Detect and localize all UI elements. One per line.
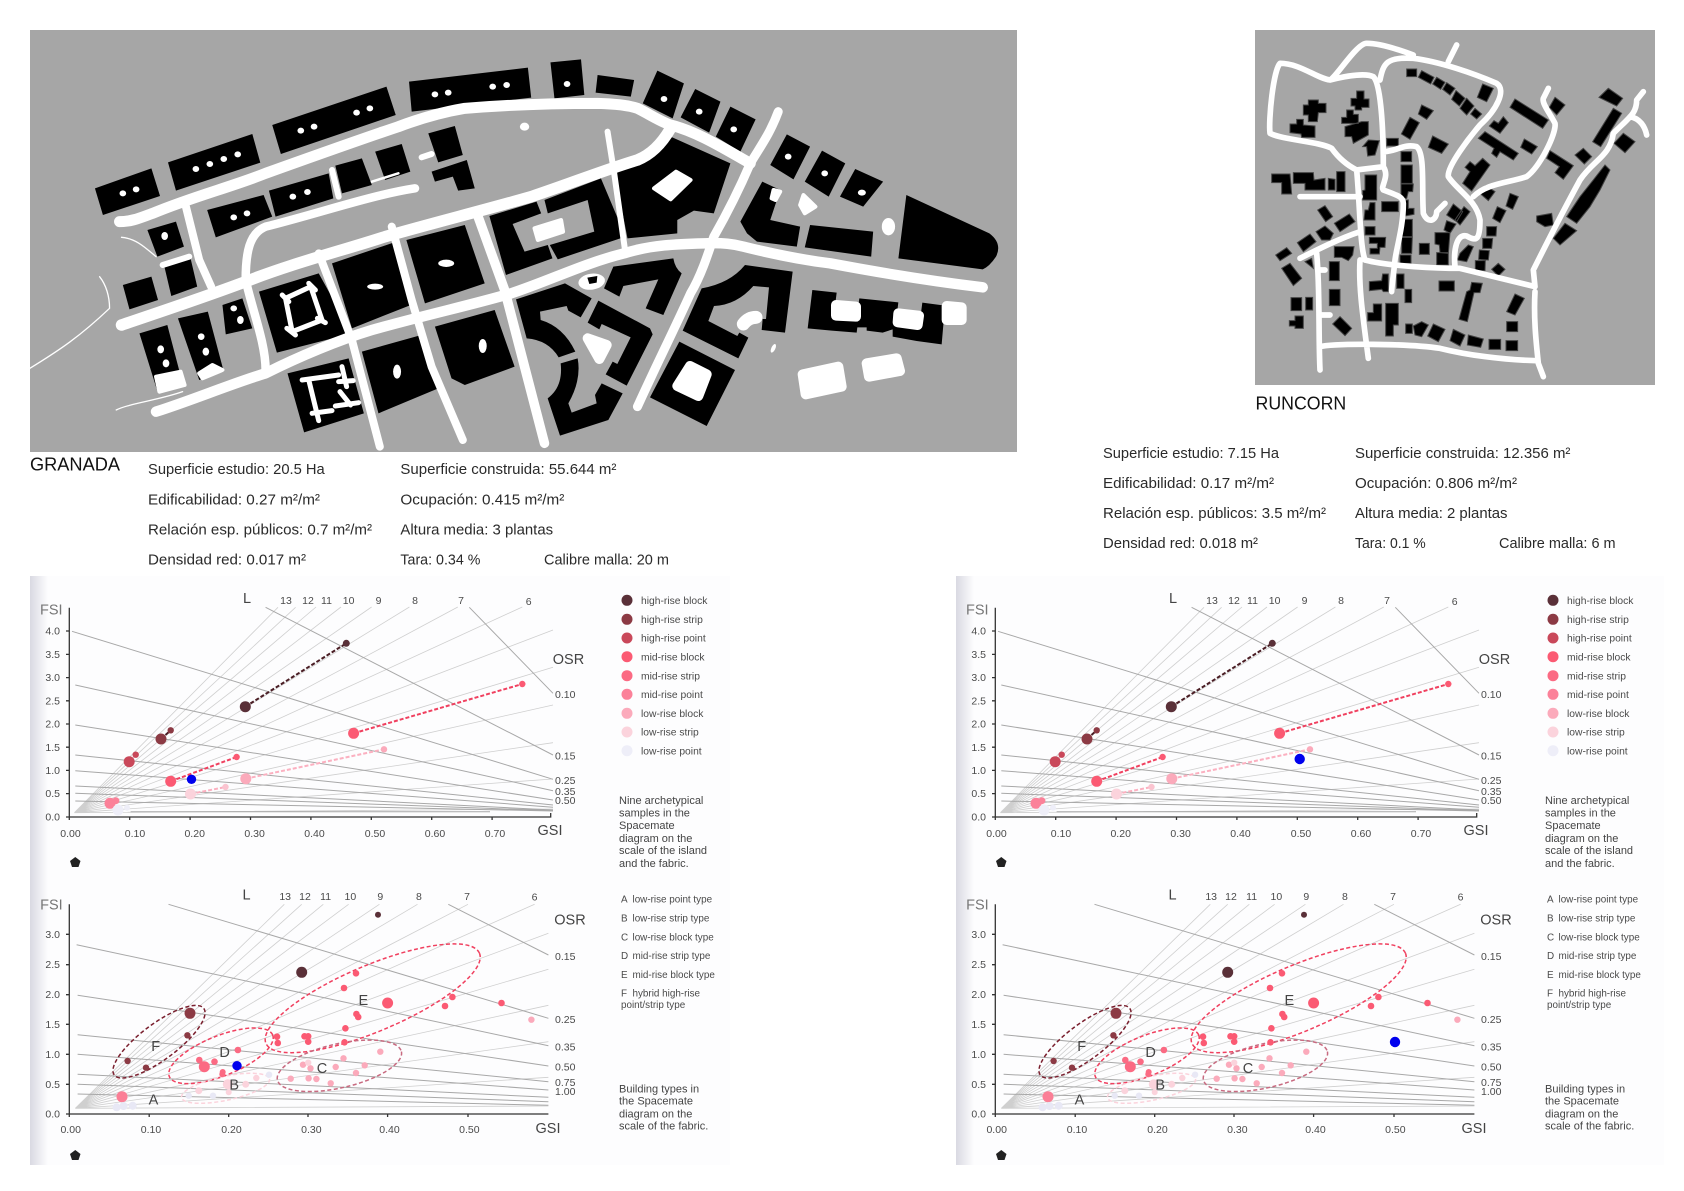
legend: fabric types: C <box>621 932 628 943</box>
axis and group labels: 0.25 <box>555 1014 576 1026</box>
axis and group labels: 8 <box>1342 891 1348 903</box>
stats: Granada: Calibre malla: 20 m <box>544 551 669 568</box>
axis labels: 7 <box>1384 595 1390 607</box>
legend: fabric types: mid-rise block type <box>1558 970 1641 981</box>
stats: Runcorn: Superficie construida: 12.356 m² <box>1355 445 1570 462</box>
legend: fabric types: low-rise block type <box>1558 932 1640 943</box>
axis labels: 0.70 <box>1411 828 1431 840</box>
axis labels: GSI <box>1464 823 1488 839</box>
axis and group labels: FSI <box>966 898 989 914</box>
legend: building types: mid-rise point <box>641 690 703 701</box>
axis labels: 10 <box>1269 595 1281 607</box>
axis labels: 0.15 <box>1481 750 1502 762</box>
axis labels: 9 <box>376 595 382 607</box>
axis labels: 0.35 <box>1481 786 1502 798</box>
axis labels: GSI <box>538 823 562 839</box>
axis and group labels: D <box>1145 1045 1156 1061</box>
legend: fabric types: point/strip type <box>621 1000 686 1011</box>
ellipse groups A-F <box>103 923 492 1109</box>
axis and group labels: 0.00 <box>60 1124 81 1136</box>
axis and group labels: OSR <box>1480 912 1512 928</box>
axis labels: 2.0 <box>45 718 60 730</box>
axis labels <box>40 591 584 840</box>
axis labels: 0.25 <box>1481 775 1502 787</box>
stats: Granada: Superficie construida: 55.644 m² <box>400 461 616 478</box>
axis and group labels: 1.5 <box>971 1019 986 1031</box>
caption: nine archetypical samples <box>619 795 707 870</box>
legend: building types: low-rise block <box>1567 709 1630 720</box>
axis labels: 0.40 <box>304 828 325 840</box>
axis and group labels: F <box>151 1039 160 1055</box>
legend: building types: high-rise point <box>641 634 706 645</box>
stats: Granada: Altura media: 3 plantas <box>400 521 553 538</box>
axis labels: 3.0 <box>45 672 60 684</box>
axis and group labels: 2.5 <box>45 959 60 971</box>
axis and group labels: 2.0 <box>45 989 60 1001</box>
axis labels: 12 <box>302 595 314 607</box>
marker: Runcorn position <box>1294 754 1305 764</box>
legend: building types: low-rise strip <box>1567 728 1625 739</box>
legend: fabric types: low-rise point type <box>1558 895 1639 906</box>
axis and group labels: 9 <box>1303 891 1309 903</box>
legend: fabric types: hybrid high-rise <box>632 989 701 1000</box>
axis and group labels: 0.10 <box>141 1124 161 1136</box>
legend: building types: high-rise block <box>1567 596 1634 607</box>
icon: publisher mark <box>70 857 80 867</box>
stats: Granada: Edificabilidad: 0.27 m²/m² <box>148 492 320 508</box>
axis and group labels: 0.35 <box>1481 1042 1502 1054</box>
axis labels: 11 <box>1247 595 1258 607</box>
axis labels: FSI <box>966 602 989 618</box>
axis labels: 2.5 <box>45 696 60 708</box>
legend: building types: high-rise strip <box>641 615 703 626</box>
axis labels: 4.0 <box>45 626 60 638</box>
legend: building types: mid-rise point <box>1567 690 1629 701</box>
caption: building types: Building types in <box>619 1083 699 1095</box>
marker: Granada position <box>232 1061 242 1070</box>
axis labels: 0.10 <box>1481 689 1502 701</box>
legend: fabric types: low-rise block type <box>632 932 714 943</box>
axis and group labels: 0.50 <box>1385 1124 1406 1136</box>
axis labels: 11 <box>321 595 332 607</box>
data points <box>113 912 535 1111</box>
stats: Runcorn: Calibre malla: 6 m <box>1499 535 1616 552</box>
axis labels: 0.10 <box>555 689 576 701</box>
axis labels: 3.5 <box>45 649 60 661</box>
axis and group labels: 10 <box>345 891 356 903</box>
axis labels: FSI <box>40 602 63 618</box>
stats: Granada: Ocupación: 0.415 m²/m² <box>400 492 564 508</box>
axis labels: 2.0 <box>971 718 986 730</box>
icon: publisher mark <box>996 857 1006 867</box>
legend: fabric types: E <box>1547 970 1554 981</box>
stats: Granada: Superficie estudio: 20.5 Ha <box>148 461 325 478</box>
caption: nine archetypical samples: Spacemate <box>619 820 675 832</box>
axis and group labels: 6 <box>1458 892 1464 904</box>
axis and group labels: 0.15 <box>1481 951 1502 963</box>
map: Runcorn figure-ground plan <box>1255 30 1655 385</box>
legend: fabric types <box>1547 895 1641 1011</box>
axis and group labels: 0.5 <box>45 1079 60 1091</box>
axis labels: 9 <box>1302 595 1308 607</box>
legend: building types: low-rise block <box>641 709 704 720</box>
legend: fabric types: low-rise strip type <box>632 913 710 924</box>
axis labels: 0.50 <box>365 828 385 840</box>
axis and group labels: 0.50 <box>555 1062 576 1074</box>
axis and group labels: 0.40 <box>379 1124 400 1136</box>
legend: building types: mid-rise block <box>1567 652 1631 663</box>
axis labels: L <box>1169 591 1177 607</box>
axis and group labels <box>966 888 1512 1137</box>
axis labels: OSR <box>1479 652 1510 668</box>
stats: Granada: Relación esp. públicos: 0.7 m²/m² <box>148 521 372 538</box>
caption: building types: diagram on the <box>619 1108 692 1120</box>
legend: fabric types: E <box>621 970 628 981</box>
caption: building types: the Spacemate <box>619 1096 693 1108</box>
axis labels: 4.0 <box>971 626 986 638</box>
axis and group labels: OSR <box>554 912 586 928</box>
axis labels: 0.5 <box>45 788 60 800</box>
caption: nine archetypical samples <box>1545 795 1633 870</box>
legend: building types: low-rise point <box>1567 746 1628 757</box>
axis and group labels: L <box>243 888 251 904</box>
legend: building types: high-rise block <box>641 596 708 607</box>
legend: fabric types: D <box>1547 951 1554 962</box>
axis and group labels: 0.20 <box>1147 1124 1168 1136</box>
axis and group labels: D <box>219 1045 230 1061</box>
stats: Runcorn: Altura media: 2 plantas <box>1355 505 1508 522</box>
axis and group labels: FSI <box>40 898 63 914</box>
caption: nine archetypical samples: Spacemate <box>1545 820 1601 832</box>
marker: Granada position <box>187 775 196 784</box>
axis and group labels: A <box>1075 1092 1085 1108</box>
axis and group labels: 0.0 <box>45 1108 60 1120</box>
legend: fabric types: mid-rise block type <box>632 970 715 981</box>
stats: Runcorn: Relación esp. públicos: 3.5 m²/m² <box>1103 505 1326 522</box>
stats: Granada: Densidad red: 0.017 m² <box>148 551 306 568</box>
axis and group labels: 0.35 <box>555 1042 576 1054</box>
chart: Runcorn fabric scale <box>966 888 1512 1160</box>
axis and group labels: 1.00 <box>1481 1086 1502 1098</box>
axis and group labels: A <box>149 1092 159 1108</box>
stats: Runcorn: Ocupación: 0.806 m²/m² <box>1355 475 1517 492</box>
legend: building types <box>1548 595 1634 757</box>
axis and group labels: 6 <box>532 892 538 904</box>
legend: fabric types: F <box>1547 989 1553 1000</box>
chart: Granada fabric scale <box>40 888 586 1160</box>
legend: building types <box>622 595 708 757</box>
axis labels: 0.10 <box>1051 828 1071 840</box>
chart: Granada island scale <box>40 591 584 867</box>
axis and group labels: B <box>1155 1078 1165 1094</box>
axis labels: L <box>243 591 251 607</box>
axis labels: 0.35 <box>555 786 576 798</box>
axis and group labels <box>40 888 586 1137</box>
heading: Granada: GRANADA <box>30 454 120 474</box>
axis and group labels: 1.0 <box>971 1049 986 1061</box>
axis labels: 10 <box>343 595 355 607</box>
axis labels: 8 <box>1338 595 1344 607</box>
axis and group labels: 10 <box>1271 891 1282 903</box>
legend: fabric types: A <box>1547 895 1554 906</box>
axis labels: 0.20 <box>184 828 205 840</box>
caption: nine archetypical samples: Nine archetypical <box>619 795 703 807</box>
caption: nine archetypical samples: scale of the island <box>1545 845 1633 857</box>
axis labels: 0.70 <box>485 828 505 840</box>
caption: nine archetypical samples: and the fabric. <box>619 858 689 870</box>
caption: building types: diagram on the <box>1545 1108 1618 1120</box>
axis and group labels: E <box>1284 993 1294 1009</box>
caption: nine archetypical samples: and the fabric. <box>1545 858 1615 870</box>
icon: publisher mark <box>996 1150 1006 1160</box>
legend: fabric types: point/strip type <box>1547 1000 1612 1011</box>
axis and group labels: 13 <box>279 891 291 903</box>
ellipse groups A-F <box>1029 923 1418 1109</box>
stats: Runcorn: Tara: 0.1 % <box>1355 535 1426 552</box>
marker: Runcorn position <box>1390 1037 1400 1047</box>
axis labels: 13 <box>1206 595 1218 607</box>
stats: Runcorn <box>1103 445 1616 552</box>
axis labels: 8 <box>412 595 418 607</box>
caption: nine archetypical samples: scale of the island <box>619 845 707 857</box>
axis and group labels: 11 <box>1246 891 1257 903</box>
caption: building types <box>1545 1083 1634 1133</box>
axis and group labels: C <box>317 1061 327 1077</box>
axis labels: 0.15 <box>555 750 576 762</box>
stats: Granada <box>148 461 669 568</box>
axis and group labels: 9 <box>377 891 383 903</box>
axis labels: OSR <box>553 652 584 668</box>
axis labels: 0.5 <box>971 788 986 800</box>
axis and group labels: 3.0 <box>971 929 986 941</box>
axis and group labels: 0.00 <box>986 1124 1007 1136</box>
axis and group labels: 1.0 <box>45 1049 60 1061</box>
panel: Granada Spacemate diagrams <box>30 576 730 1165</box>
legend: fabric types: mid-rise strip type <box>632 951 711 962</box>
stats: Granada: Tara: 0.34 % <box>400 551 480 568</box>
heading: Runcorn: RUNCORN <box>1256 394 1346 414</box>
axis and group labels: 2.0 <box>971 989 986 1001</box>
axis and group labels: E <box>358 993 368 1009</box>
axis and group labels: 1.5 <box>45 1019 60 1031</box>
axis and group labels: 7 <box>464 891 470 903</box>
caption: building types: scale of the fabric. <box>619 1121 708 1133</box>
legend: fabric types: hybrid high-rise <box>1558 989 1627 1000</box>
axis labels: 12 <box>1228 595 1240 607</box>
axis labels: 0.0 <box>45 812 60 824</box>
caption: nine archetypical samples: diagram on the <box>1545 833 1618 845</box>
axis and group labels: 0.75 <box>1481 1077 1502 1089</box>
axis and group labels: 0.10 <box>1067 1124 1087 1136</box>
axis and group labels: 0.25 <box>1481 1014 1502 1026</box>
axis labels: 1.0 <box>45 765 60 777</box>
axis labels: 3.0 <box>971 672 986 684</box>
axis and group labels: L <box>1169 888 1177 904</box>
legend: fabric types: F <box>621 989 627 1000</box>
axis labels: 0.25 <box>555 775 576 787</box>
axis and group labels: GSI <box>536 1121 560 1137</box>
legend: building types: mid-rise strip <box>1567 671 1626 682</box>
axis labels: 7 <box>458 595 464 607</box>
caption: building types: Building types in <box>1545 1083 1625 1095</box>
caption: building types <box>619 1083 708 1133</box>
legend: fabric types <box>621 895 715 1011</box>
legend: building types: high-rise strip <box>1567 615 1629 626</box>
legend: fabric types: low-rise point type <box>632 895 713 906</box>
axis labels: 0.30 <box>1170 828 1191 840</box>
legend: fabric types: B <box>621 913 628 924</box>
stats: Runcorn: Densidad red: 0.018 m² <box>1103 535 1258 552</box>
axis and group labels: 0.0 <box>971 1108 986 1120</box>
axis labels: 0.00 <box>986 828 1007 840</box>
legend: building types: high-rise point <box>1567 634 1632 645</box>
legend: fabric types: A <box>621 895 628 906</box>
axis labels: 0.10 <box>125 828 145 840</box>
axis and group labels: 2.5 <box>971 959 986 971</box>
map: Granada figure-ground plan <box>30 30 1017 452</box>
axis labels: 2.5 <box>971 696 986 708</box>
axis labels: 0.50 <box>1481 795 1502 807</box>
axis labels: 0.50 <box>555 795 576 807</box>
caption: nine archetypical samples: samples in the <box>1545 808 1616 820</box>
axis labels: 0.00 <box>60 828 81 840</box>
axis labels: 0.0 <box>971 812 986 824</box>
legend: fabric types: mid-rise strip type <box>1558 951 1637 962</box>
axis and group labels: F <box>1077 1039 1086 1055</box>
axis labels: 0.30 <box>244 828 265 840</box>
axis labels: 0.60 <box>1351 828 1371 840</box>
axis labels: 13 <box>280 595 292 607</box>
axis and group labels: 0.5 <box>971 1079 986 1091</box>
icon: publisher mark <box>70 1150 80 1160</box>
axis and group labels: B <box>229 1078 239 1094</box>
axis labels: 1.0 <box>971 765 986 777</box>
stats: Runcorn: Edificabilidad: 0.17 m²/m² <box>1103 475 1274 492</box>
axis labels: 0.40 <box>1230 828 1251 840</box>
legend: fabric types: B <box>1547 913 1554 924</box>
axis and group labels: 0.50 <box>459 1124 480 1136</box>
legend: fabric types: D <box>621 951 628 962</box>
axis labels: 1.5 <box>45 742 60 754</box>
legend: fabric types: C <box>1547 932 1554 943</box>
caption: nine archetypical samples: Nine archetypical <box>1545 795 1629 807</box>
axis and group labels: 11 <box>320 891 331 903</box>
legend: building types: low-rise point <box>641 746 702 757</box>
axis and group labels: 0.30 <box>1227 1124 1248 1136</box>
axis and group labels: 1.00 <box>555 1086 576 1098</box>
axis and group labels: 12 <box>1225 891 1237 903</box>
axis and group labels: 8 <box>416 891 422 903</box>
axis and group labels: 0.75 <box>555 1077 576 1089</box>
stats: Runcorn: Superficie estudio: 7.15 Ha <box>1103 445 1280 462</box>
axis labels: 6 <box>1452 596 1458 608</box>
axis and group labels: GSI <box>1462 1121 1486 1137</box>
panel: Runcorn Spacemate diagrams <box>956 576 1664 1165</box>
axis and group labels: 7 <box>1390 891 1396 903</box>
axis and group labels: 0.20 <box>221 1124 242 1136</box>
caption: nine archetypical samples: samples in the <box>619 808 690 820</box>
axis labels: 1.5 <box>971 742 986 754</box>
legend: building types: low-rise strip <box>641 728 699 739</box>
axis and group labels: 0.30 <box>301 1124 322 1136</box>
axis and group labels: 0.15 <box>555 951 576 963</box>
axis and group labels: C <box>1243 1061 1253 1077</box>
axis and group labels: 13 <box>1205 891 1217 903</box>
axis and group labels: 3.0 <box>45 929 60 941</box>
axis and group labels: 0.50 <box>1481 1062 1502 1074</box>
axis labels: 3.5 <box>971 649 986 661</box>
caption: building types: scale of the fabric. <box>1545 1121 1634 1133</box>
legend: building types: mid-rise strip <box>641 671 700 682</box>
axis and group labels: 0.40 <box>1305 1124 1326 1136</box>
legend: building types: mid-rise block <box>641 652 705 663</box>
chart: Runcorn island scale <box>966 591 1510 867</box>
axis labels: 0.60 <box>425 828 445 840</box>
axis and group labels: 12 <box>299 891 311 903</box>
axis labels: 6 <box>526 596 532 608</box>
axis labels <box>966 591 1510 840</box>
caption: nine archetypical samples: diagram on the <box>619 833 692 845</box>
legend: fabric types: low-rise strip type <box>1558 913 1636 924</box>
caption: building types: the Spacemate <box>1545 1096 1619 1108</box>
axis labels: 0.50 <box>1291 828 1311 840</box>
data points <box>1039 912 1461 1111</box>
axis labels: 0.20 <box>1110 828 1131 840</box>
